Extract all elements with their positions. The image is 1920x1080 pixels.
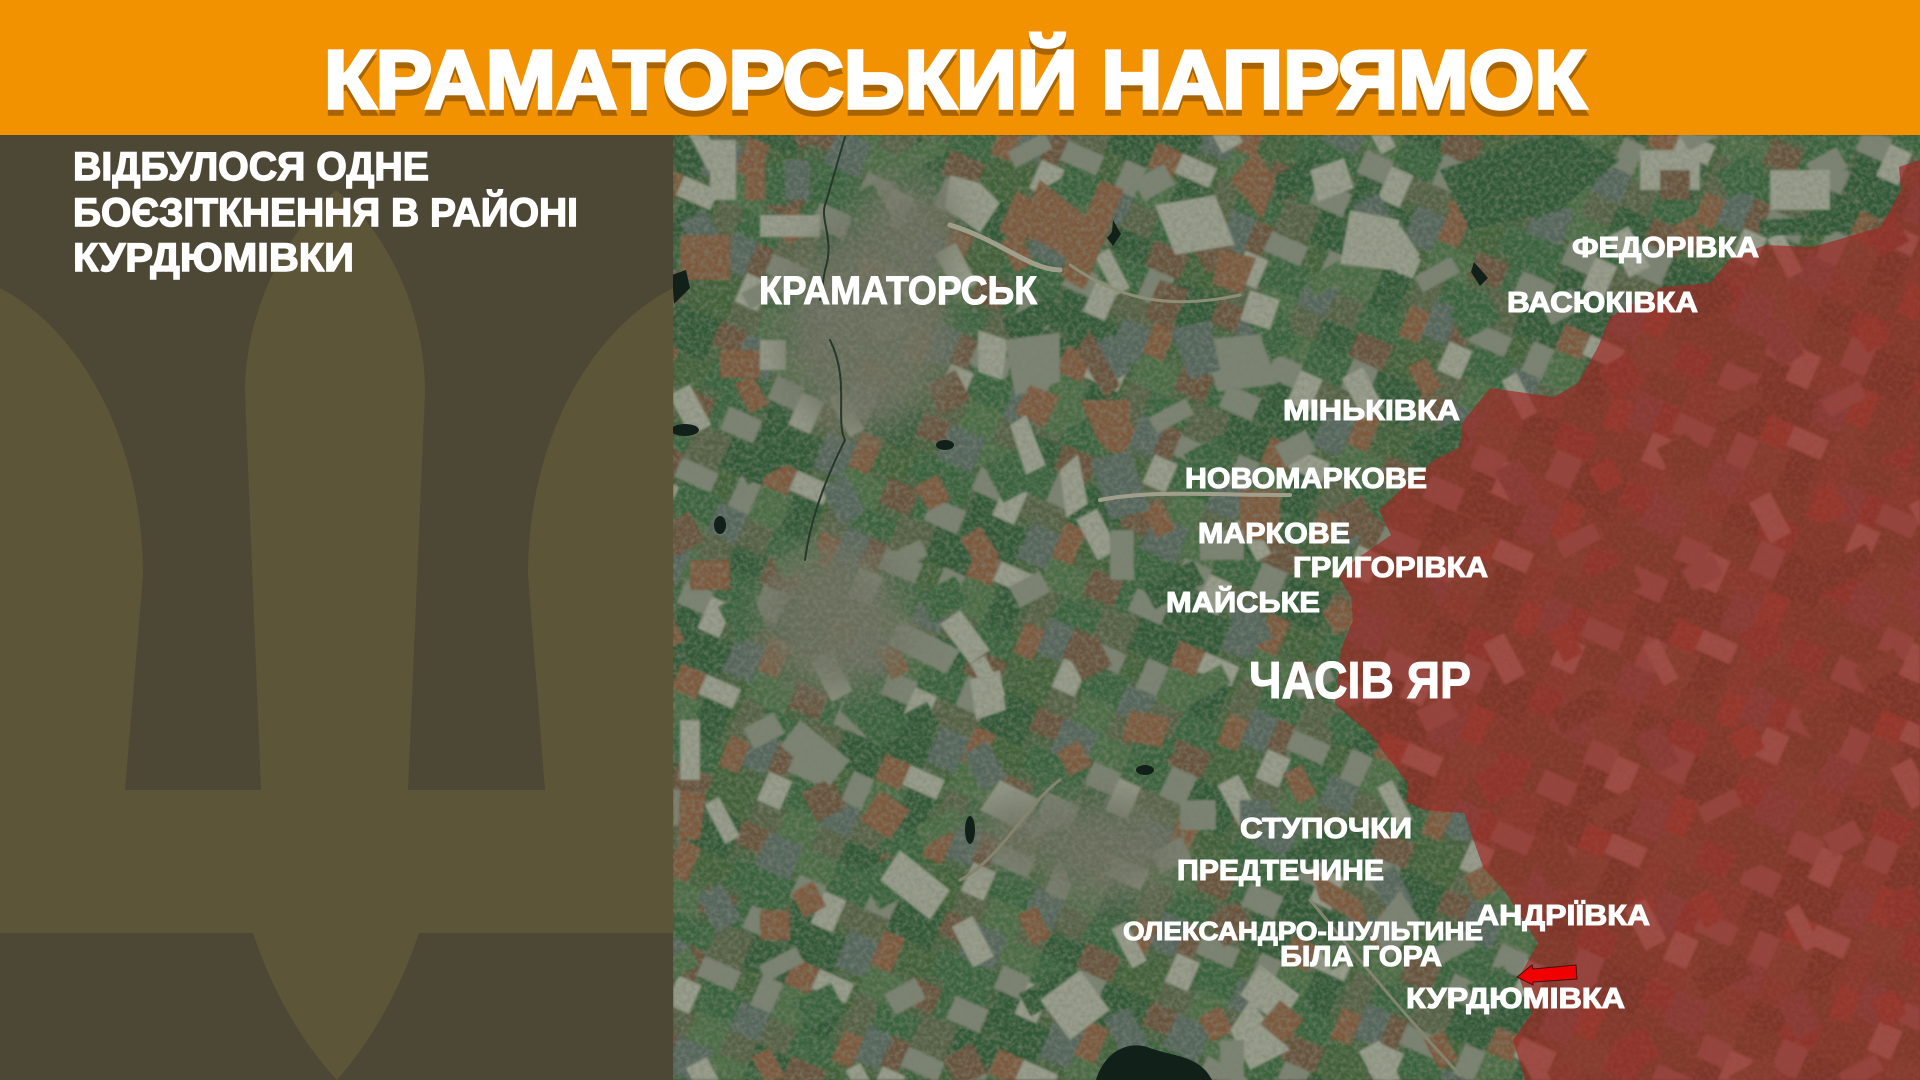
- city areas: [760, 175, 1175, 905]
- rivers, gullies and water: [805, 137, 1460, 1075]
- left panel background: [0, 135, 673, 1080]
- map place labels: КРАМАТОРСЬК: [759, 269, 1038, 313]
- map place labels: ГРИГОРІВКА: [1293, 552, 1488, 584]
- map place labels: МІНЬКІВКА: [1283, 395, 1460, 427]
- title: КРАМАТОРСЬКИЙ НАПРЯМОК: [324, 32, 1586, 126]
- map place labels: ВАСЮКІВКА: [1507, 287, 1698, 319]
- hand-placed fields: [678, 130, 1890, 1080]
- map place labels: СТУПОЧКИ: [1240, 813, 1412, 845]
- red attack arrow: [1517, 965, 1577, 985]
- map place labels: [759, 232, 1759, 1015]
- map place labels: НОВОМАРКОВЕ: [1185, 463, 1427, 495]
- map place labels: МАРКОВЕ: [1198, 518, 1350, 550]
- contrast wash: [673, 135, 1920, 1080]
- summary text: ВІДБУЛОСЯ ОДНЕ: [73, 145, 429, 189]
- map place labels: ФЕДОРІВКА: [1572, 232, 1759, 264]
- occupied territory overlay: [1335, 135, 1920, 1080]
- summary text: КУРДЮМІВКИ: [73, 236, 354, 280]
- summary text: [73, 145, 578, 280]
- map place labels: МАЙСЬКЕ: [1166, 585, 1320, 619]
- map place labels: ПРЕДТЕЧИНЕ: [1177, 855, 1384, 887]
- map place labels: ОЛЕКСАНДРО-ШУЛЬТИНЕ: [1123, 916, 1483, 946]
- map place labels: БІЛА ГОРА: [1280, 941, 1442, 973]
- trident emblem: [0, 190, 673, 1080]
- header band: [0, 0, 1920, 135]
- map place labels: ЧАСІВ ЯР: [1249, 652, 1471, 710]
- satellite map: [671, 130, 1920, 1080]
- summary text: БОЄЗІТКНЕННЯ В РАЙОНІ: [73, 189, 578, 235]
- map place labels: КУРДЮМІВКА: [1406, 983, 1625, 1015]
- map place labels: АНДРІЇВКА: [1476, 899, 1650, 932]
